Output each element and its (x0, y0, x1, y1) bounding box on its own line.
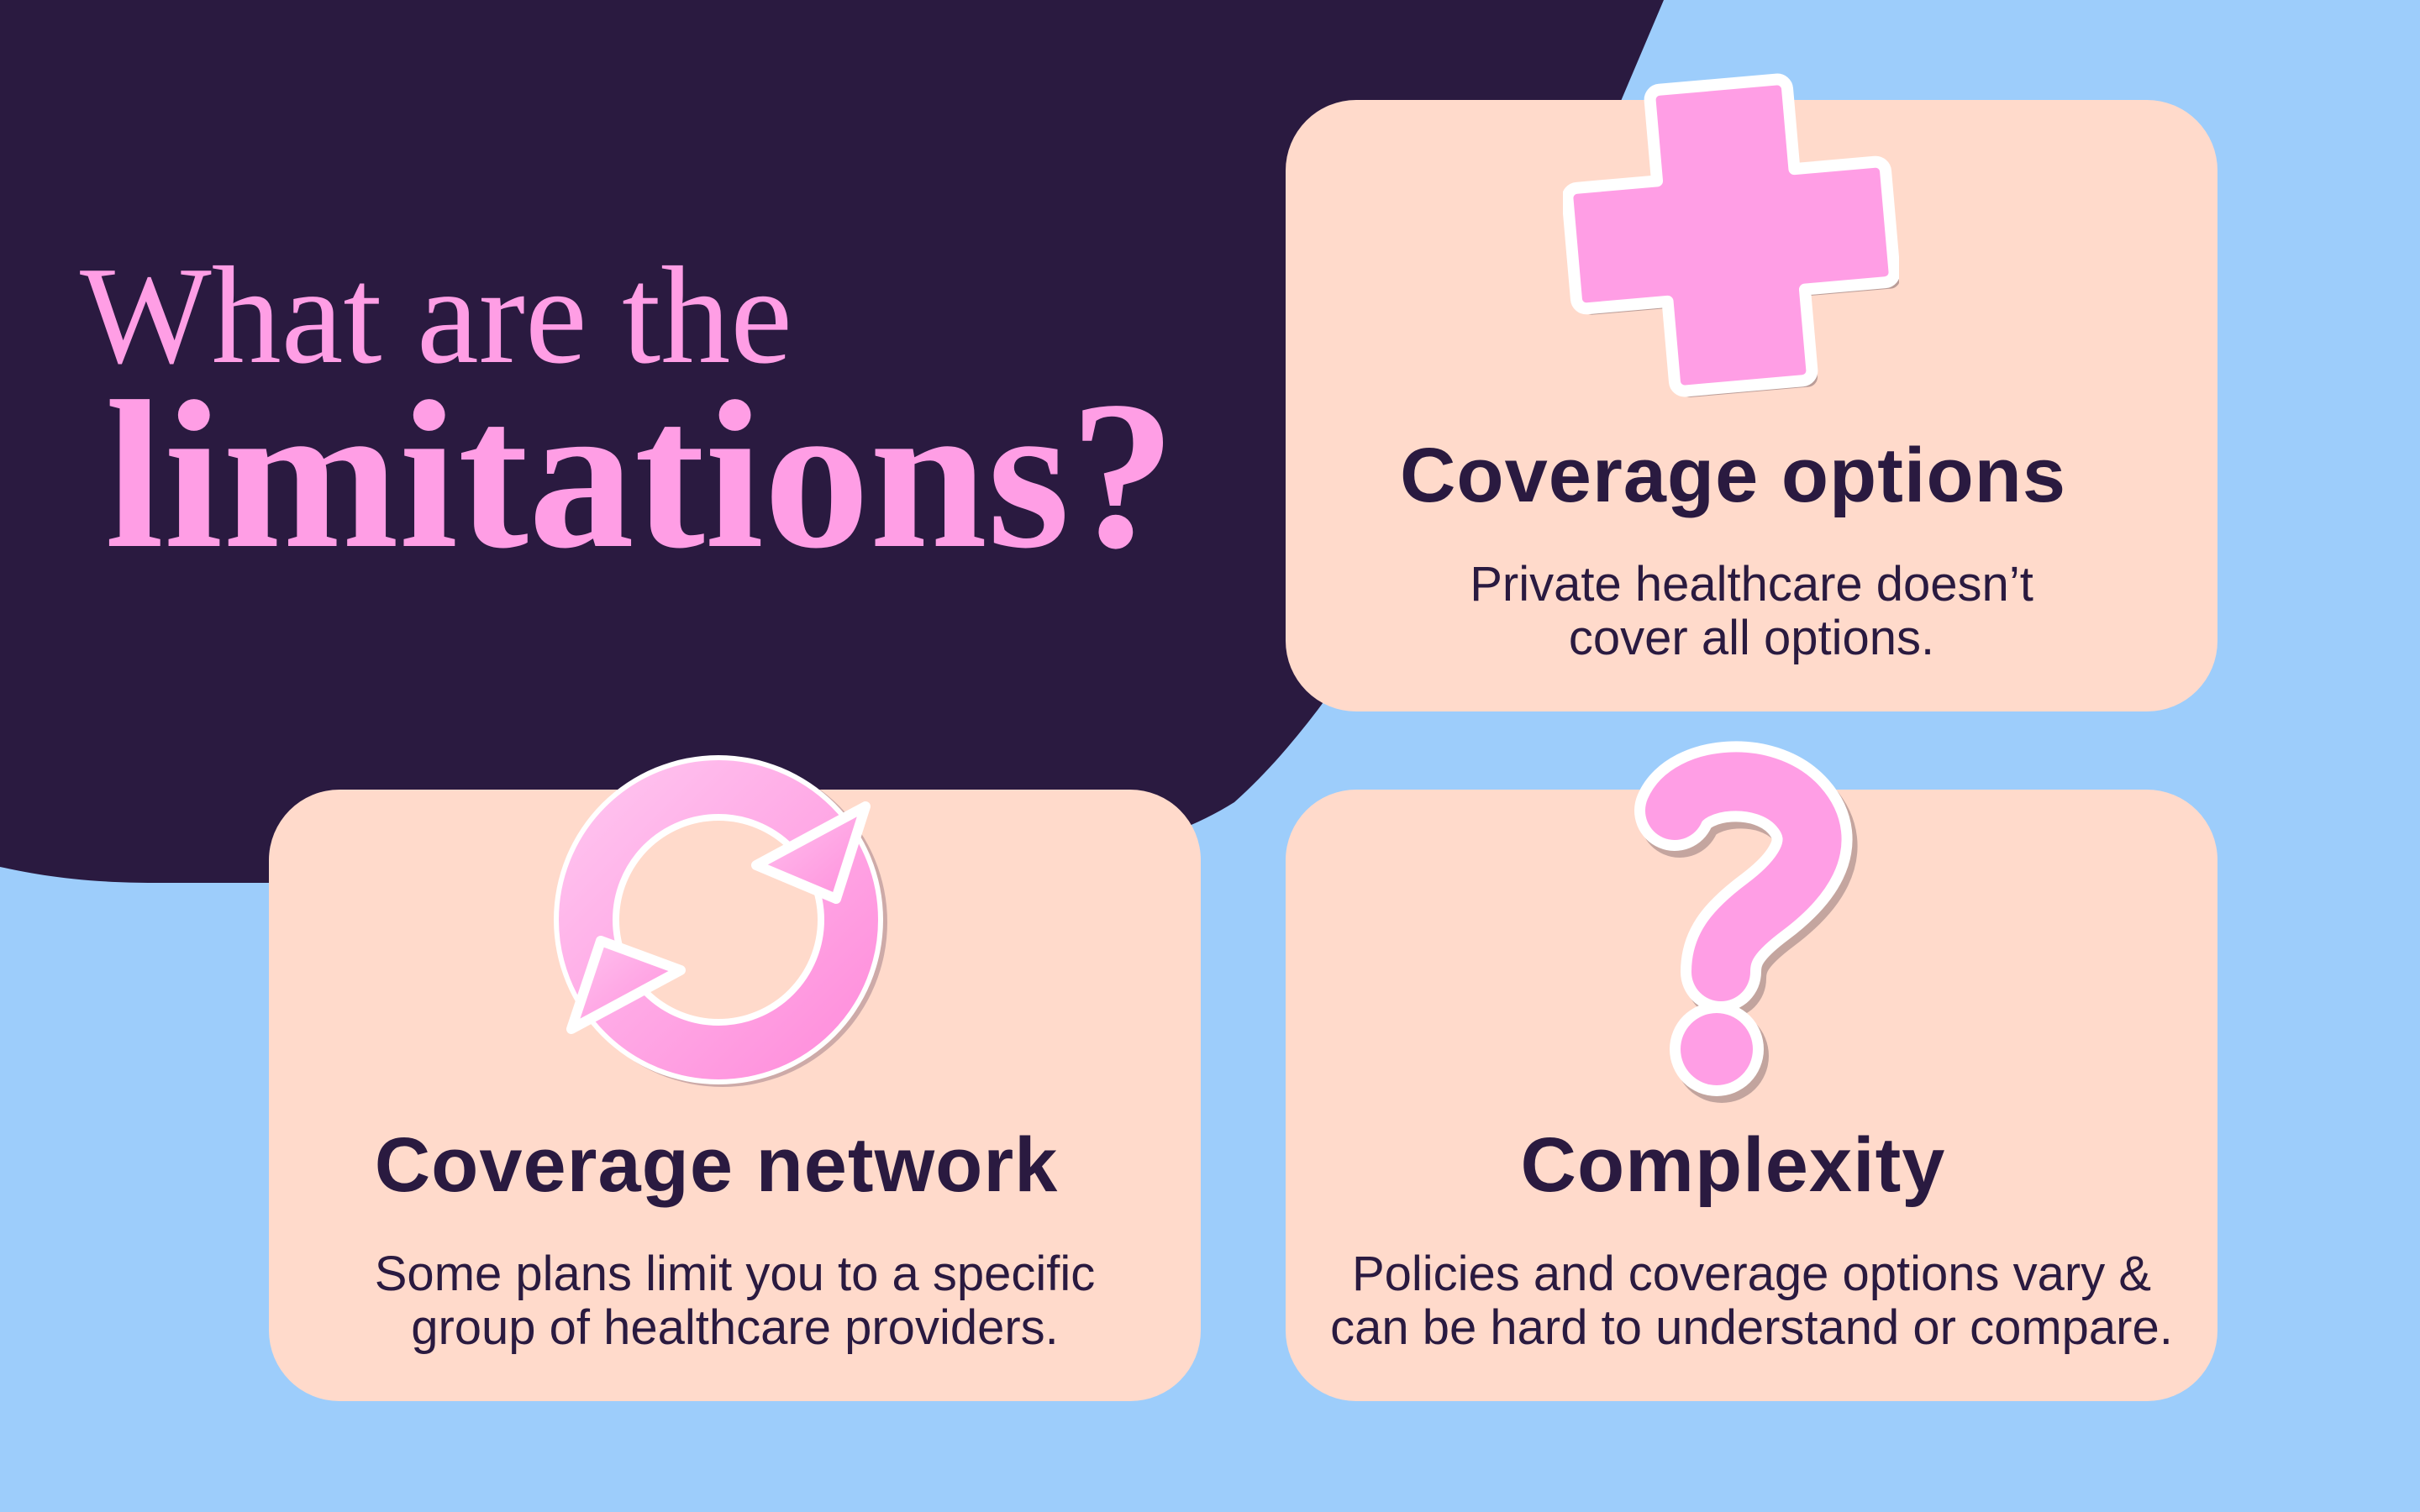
body text: can be hard to understand or compare. (1330, 1300, 2173, 1355)
body text: Policies and coverage options vary & (1352, 1247, 2151, 1301)
heading: Coverage options (1400, 433, 2066, 518)
panel: complexity (1286, 790, 2217, 1401)
body text (1330, 1247, 2173, 1355)
body text: cover all options. (1569, 611, 1934, 665)
heading: Complexity (1521, 1122, 1945, 1208)
heading: Coverage network (375, 1122, 1058, 1208)
title line 1: What are the (80, 238, 792, 392)
panel: coverage options (1286, 100, 2217, 711)
title (80, 238, 1176, 592)
body text: Private healthcare doesn’t (1470, 557, 2033, 612)
icon: question mark (1634, 741, 1858, 1103)
icon: cross (1563, 74, 1899, 397)
body text (1470, 557, 2033, 665)
body text (375, 1247, 1095, 1355)
body text: group of healthcare providers. (411, 1300, 1059, 1355)
icon: refresh (554, 755, 887, 1087)
body text: Some plans limit you to a specific (375, 1247, 1095, 1301)
panel: coverage network (269, 790, 1201, 1401)
title line 2: limitations? (105, 357, 1176, 592)
